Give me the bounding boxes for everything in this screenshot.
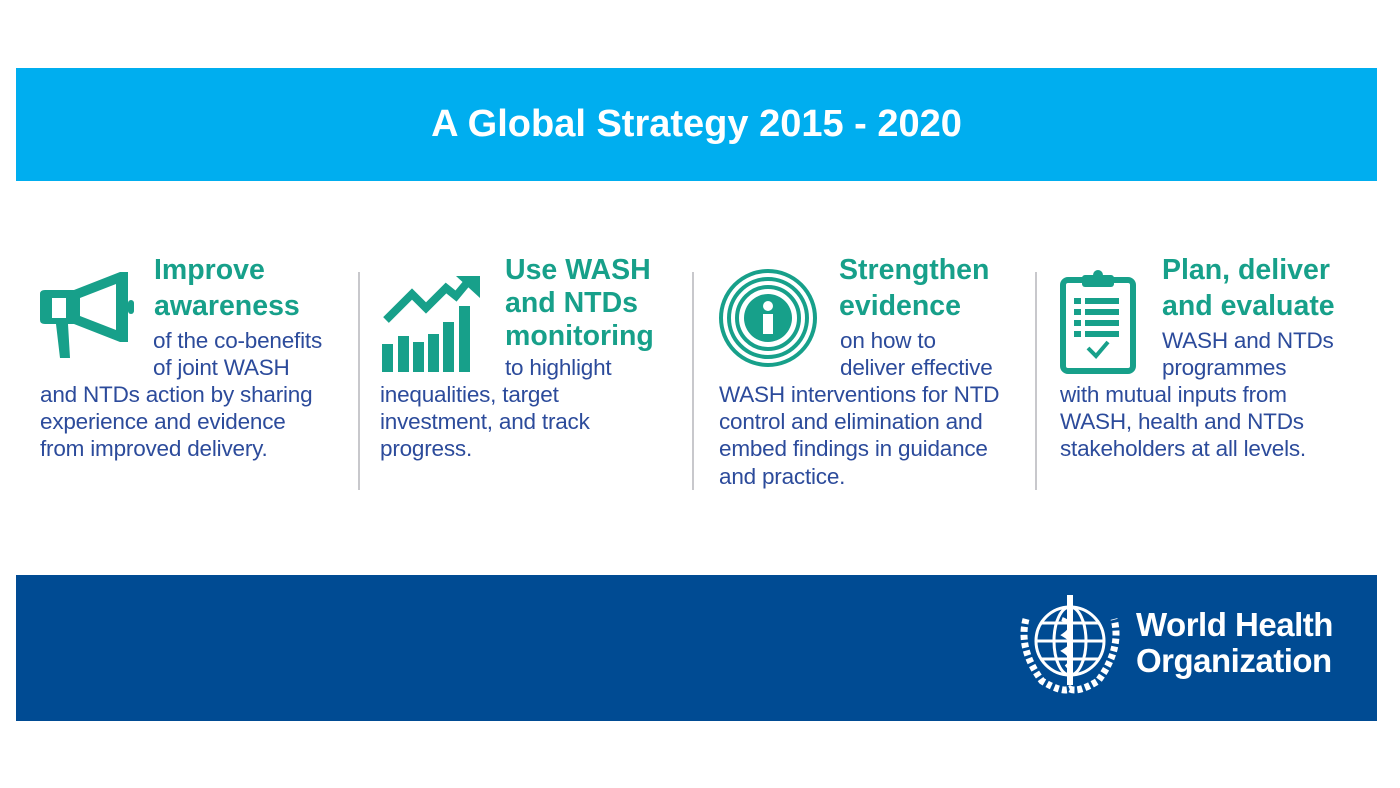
panel: strengthen evidence: WASH interventions for NTD xyxy=(719,382,999,407)
panel: strengthen evidence xyxy=(719,254,999,489)
panel: plan deliver evaluate: and evaluate xyxy=(1162,290,1335,322)
panel: improve awareness xyxy=(40,254,322,461)
panel: monitoring: and NTDs xyxy=(505,287,638,319)
heading: Use WASH xyxy=(505,254,651,286)
panel: monitoring: progress. xyxy=(380,436,472,461)
panel: monitoring: monitoring xyxy=(505,320,654,352)
icon: clipboard xyxy=(1060,270,1136,374)
panel: plan deliver evaluate: stakeholders at all levels. xyxy=(1060,436,1306,461)
panel: plan deliver evaluate: programmes xyxy=(1162,355,1286,380)
panel: monitoring: investment, and track xyxy=(380,409,590,434)
panel: strengthen evidence: deliver effective xyxy=(840,355,993,380)
panel: improve awareness: experience and evidence xyxy=(40,409,286,434)
panel: strengthen evidence: control and elimination and xyxy=(719,409,983,434)
panel: plan deliver evaluate: WASH, health and NTDs xyxy=(1060,409,1304,434)
icon: info circles xyxy=(719,269,817,367)
body text: of the co-benefits xyxy=(153,328,322,353)
logo text: Organization xyxy=(1136,642,1332,679)
panel: monitoring: inequalities, target xyxy=(380,382,559,407)
icon: WHO emblem xyxy=(1020,595,1120,694)
body text: on how to xyxy=(840,328,936,353)
panel: improve awareness: from improved delivery. xyxy=(40,436,268,461)
logo text xyxy=(1136,606,1333,679)
panel: improve awareness: and NTDs action by sharing xyxy=(40,382,312,407)
body text: WASH and NTDs xyxy=(1162,328,1334,353)
footer banner xyxy=(16,575,1377,721)
panel: monitoring xyxy=(380,254,654,461)
body text: to highlight xyxy=(505,355,611,380)
heading: Strengthen xyxy=(839,254,989,286)
logo text: World Health xyxy=(1136,606,1333,643)
panel: plan deliver evaluate: with mutual inputs from xyxy=(1060,382,1287,407)
heading: Improve xyxy=(154,254,265,286)
icon: megaphone xyxy=(40,272,134,358)
title banner xyxy=(16,68,1377,181)
panel: strengthen evidence: and practice. xyxy=(719,464,845,489)
panel: strengthen evidence: evidence xyxy=(839,290,961,322)
panel: improve awareness: awareness xyxy=(154,290,300,322)
icon: chart xyxy=(382,276,480,372)
panel: strengthen evidence: embed findings in guidance xyxy=(719,436,988,461)
panel: plan deliver evaluate xyxy=(1060,254,1335,461)
heading: Plan, deliver xyxy=(1162,254,1330,286)
panel: improve awareness: of joint WASH xyxy=(153,355,290,380)
title: A Global Strategy 2015 - 2020 xyxy=(431,103,962,145)
WHO logo xyxy=(1020,595,1333,694)
